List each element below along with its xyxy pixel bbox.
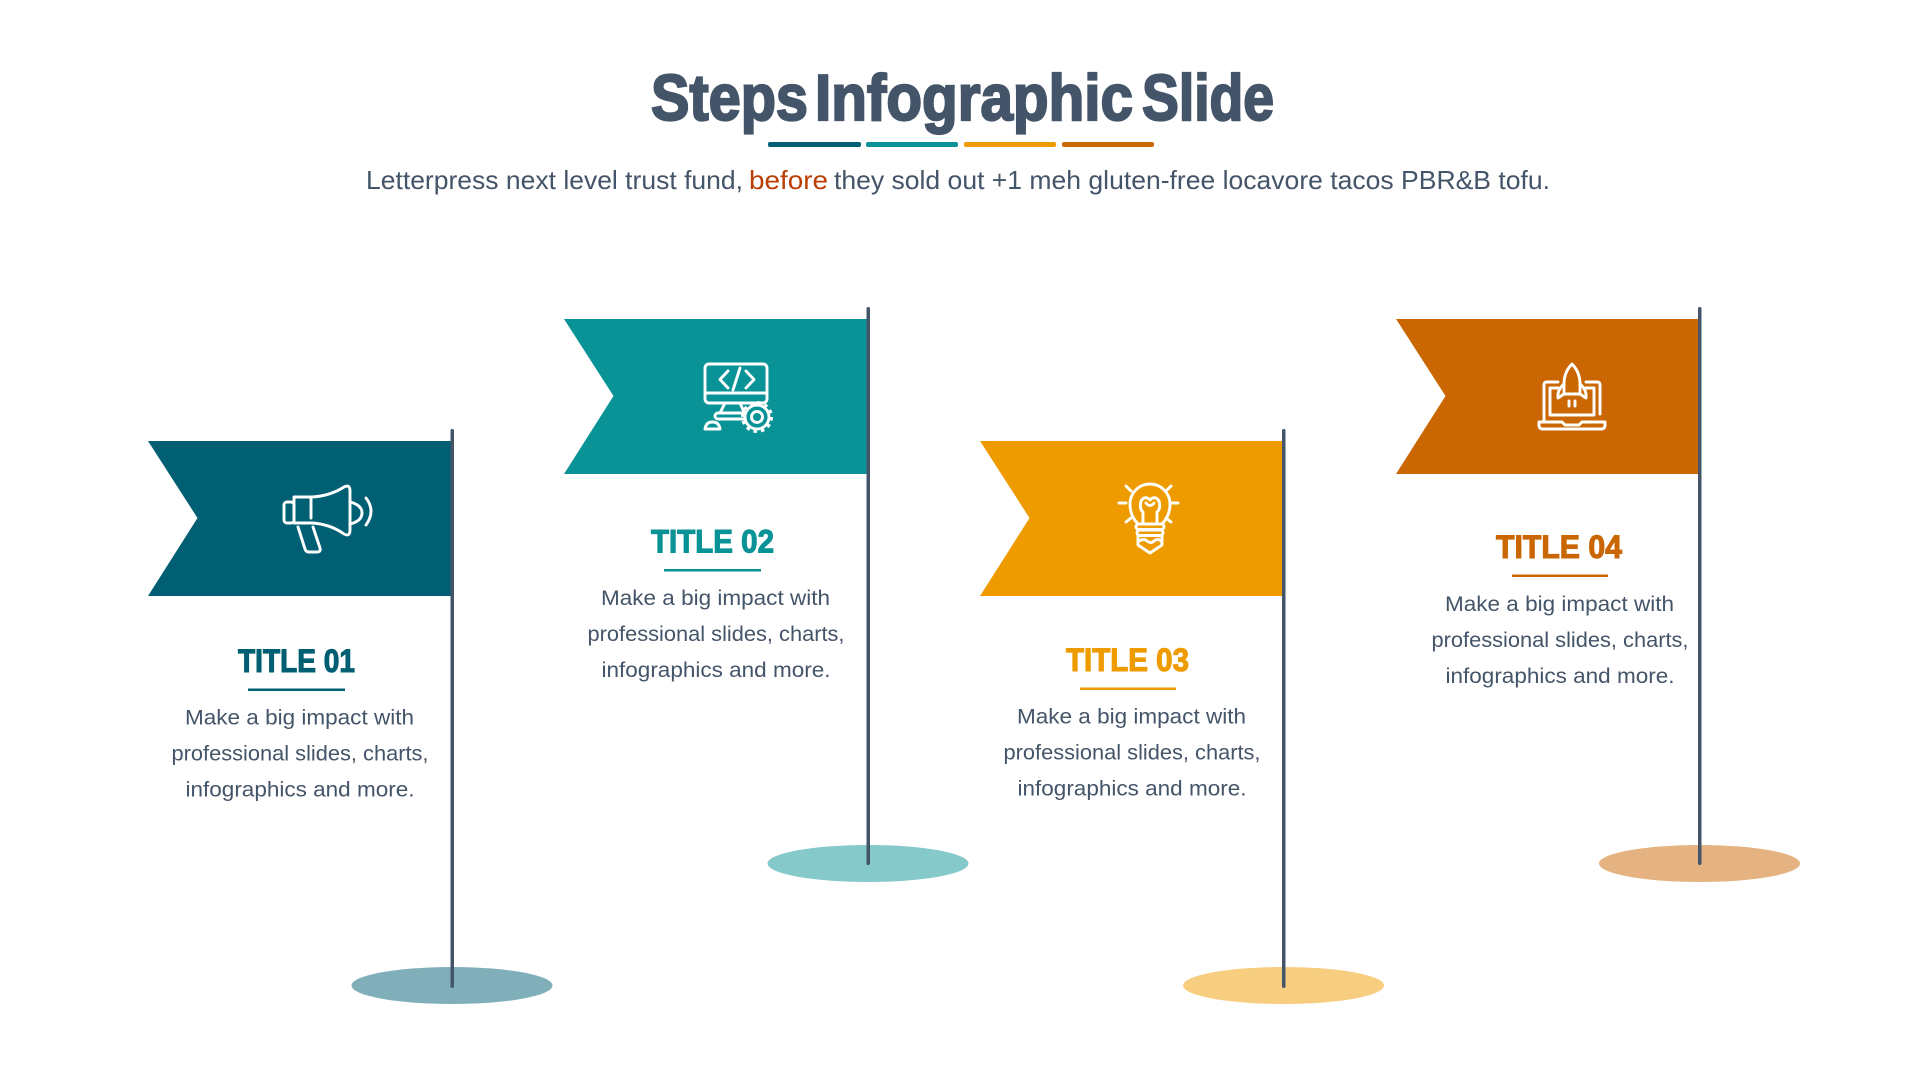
title underline bars [768,142,1154,147]
ground shadow 04 [1599,845,1800,882]
subtitle [366,165,1550,195]
heading underline 02 [664,569,761,572]
description 03 [1004,704,1260,800]
icon: monitor with code and gear [705,364,772,432]
heading underline 01 [248,688,345,691]
description 03: Make a big impact with [1017,704,1246,728]
heading 01: TITLE 01 [238,643,355,679]
description 01 [172,706,428,802]
ground shadow 03 [1183,967,1384,1004]
step 01 [148,429,552,1004]
description 04: professional slides, charts, [1432,628,1688,652]
step 03 [980,429,1384,1004]
flag 03 [980,441,1285,596]
heading 02: TITLE 02 [651,524,774,560]
icon: light bulb with pencil tip [1119,484,1178,553]
pole 01 [450,429,454,988]
pole 04 [1698,307,1702,865]
description 01: infographics and more. [186,778,414,802]
description 03: infographics and more. [1018,776,1246,800]
heading underline 03 [1080,688,1176,690]
pole 03 [1282,429,1286,988]
description 02: Make a big impact with [601,586,830,610]
description 02: infographics and more. [602,658,830,682]
flag 01 [148,441,453,596]
heading underline 04 [1512,574,1608,577]
subtitle: Letterpress next level trust fund, [366,165,743,195]
description 04: infographics and more. [1446,664,1674,688]
title: Infographic [815,61,1133,134]
description 01: Make a big impact with [185,706,414,730]
heading 04: TITLE 04 [1496,529,1622,565]
title: Slide [1142,61,1274,134]
title [651,61,1274,134]
description 02: professional slides, charts, [588,622,844,646]
pole 02 [866,307,870,865]
title: Steps [651,61,808,134]
ground shadow 01 [352,967,552,1004]
heading 03: TITLE 03 [1066,642,1189,678]
subtitle: they sold out +1 meh gluten-free locavore tacos PBR&B tofu. [834,165,1550,195]
description 03: professional slides, charts, [1004,740,1260,764]
ground shadow 02 [768,845,968,882]
flag 04 [1396,319,1701,474]
description 02 [588,586,844,682]
description 04: Make a big impact with [1445,592,1674,616]
icon: megaphone [284,486,371,552]
description 04 [1432,592,1688,688]
subtitle: before [749,165,828,195]
flag 02 [564,319,869,474]
step 04 [1396,307,1800,882]
step 02 [564,307,968,882]
description 01: professional slides, charts, [172,742,428,766]
icon: laptop with rocket [1539,364,1605,429]
